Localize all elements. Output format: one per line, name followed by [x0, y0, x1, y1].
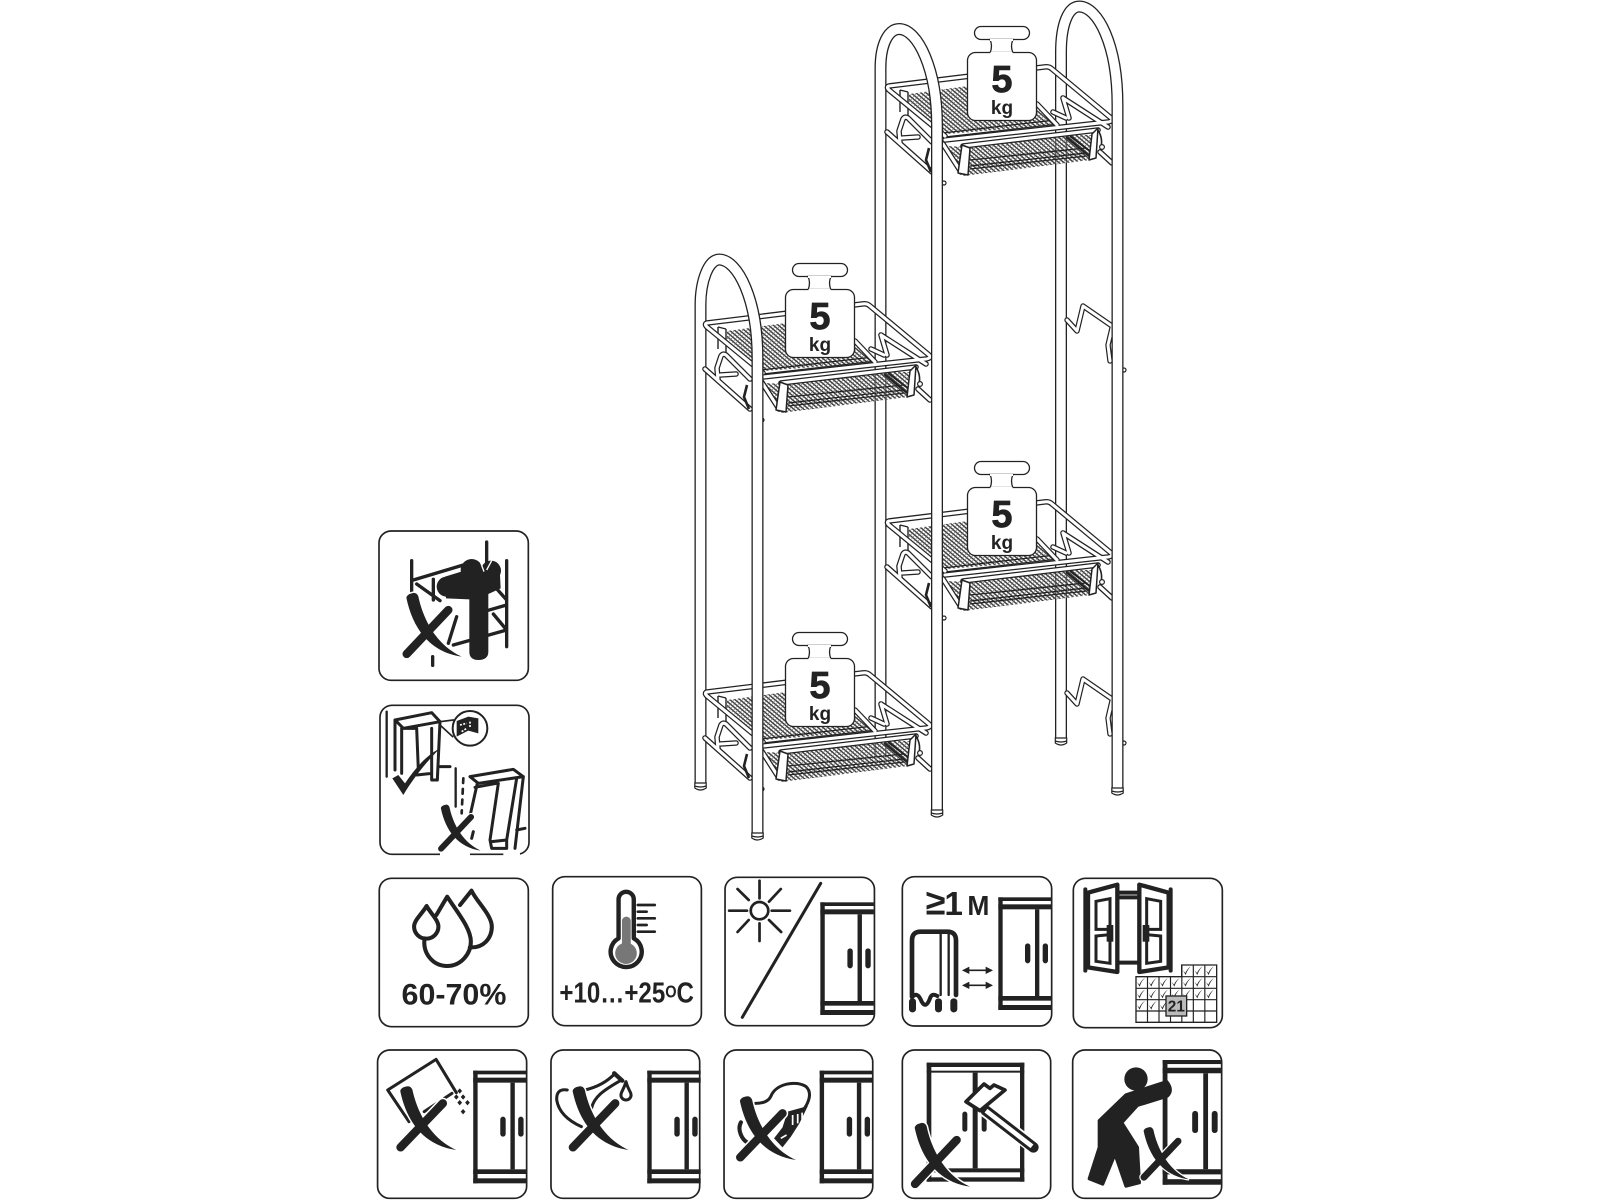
icon: humidity 60-70% [379, 878, 528, 1027]
weight: 5 kg lower right shelf [968, 462, 1036, 556]
calendar [1136, 965, 1217, 1022]
icon: anchor the unit to the wall [380, 705, 529, 854]
front frame legs [719, 6, 1118, 838]
shelf unit illustration [695, 6, 1126, 840]
window [1085, 885, 1171, 972]
left tower upper basket shelf [705, 304, 930, 422]
right tower top basket shelf [887, 67, 1112, 185]
weight: 5 kg lower left shelf: 5 [809, 665, 831, 707]
icon: keep away from direct sunlight [725, 877, 874, 1026]
weight: 5 kg lower left shelf: kg [809, 704, 831, 725]
right tower lower basket shelf [887, 502, 1112, 620]
weight: 5 kg top right shelf: kg [991, 98, 1013, 119]
frame [927, 1063, 1024, 1182]
icon: temperature +10...+25 C: +10…+25 [559, 978, 687, 1010]
weight: 5 kg top right shelf: 5 [991, 59, 1013, 101]
weight: 5 kg upper left shelf [786, 264, 854, 358]
icon: keep 1 m from heaters [902, 877, 1052, 1026]
weight: 5 kg lower right shelf: 5 [991, 494, 1013, 536]
icon: temperature +10...+25 C [553, 877, 701, 1026]
front leg feet [752, 788, 1123, 840]
rear frame legs [700, 6, 1080, 788]
icon: do not push the unit [1073, 1050, 1222, 1198]
icon: do not strike with a hammer [902, 1050, 1051, 1198]
weight: 5 kg upper left shelf: kg [809, 335, 831, 356]
lower side hook [1067, 679, 1126, 745]
weight: 5 kg lower left shelf [786, 632, 854, 726]
calendar: 21 [1168, 998, 1185, 1015]
weight: 5 kg lower right shelf: kg [991, 533, 1013, 554]
weight: 5 kg top right shelf [968, 26, 1036, 120]
icon: do not use chemical liquids [551, 1050, 701, 1198]
icon: do not use abrasive powders [378, 1050, 527, 1198]
upper side hook [1067, 306, 1126, 372]
left tower lower basket shelf [705, 673, 930, 791]
climbing figure [437, 559, 501, 660]
weight: 5 kg upper left shelf: 5 [809, 296, 831, 338]
icon: temperature +10...+25 C: C [677, 978, 694, 1010]
icon: temperature +10...+25 C: O [665, 981, 677, 1001]
icon: keep 1 m from heaters: ≥ [926, 881, 945, 922]
icon: do not use a wet rag [724, 1050, 873, 1198]
icon: keep 1 m from heaters: М [967, 890, 989, 921]
icon: humidity 60-70%: 60-70% [402, 979, 507, 1011]
icon: ventilate the room for 21 days [1073, 878, 1222, 1028]
rear leg feet [695, 738, 1067, 790]
icon: do not climb on the shelf [379, 531, 528, 680]
icon: keep 1 m from heaters: 1 [944, 886, 963, 923]
